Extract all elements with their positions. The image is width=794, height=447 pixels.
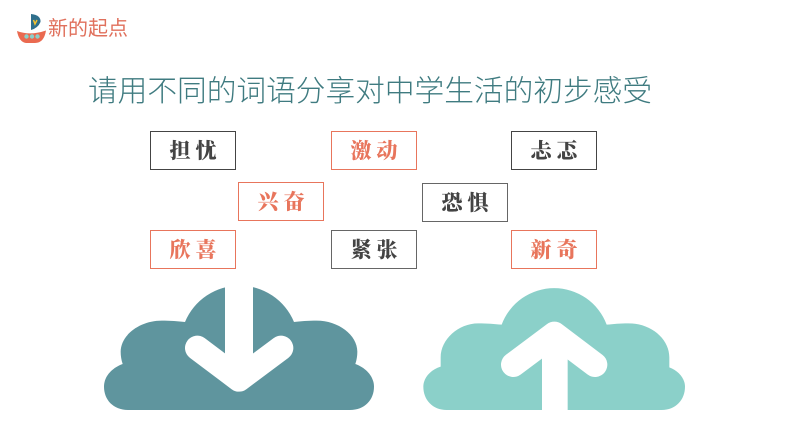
word box: 紧张: 紧张 [350,234,402,264]
word box: 恐惧 [422,183,508,222]
word box: 忐忑 [511,131,597,170]
word box: 新奇 [511,230,597,269]
word box: 恐惧: 恐惧 [442,187,494,217]
word box: 担忧 [150,131,236,170]
word box: 新奇: 新奇 [530,234,582,264]
icon: boat logo [17,14,46,43]
word box: 紧张 [331,230,417,269]
title: 请用不同的词语分享对中学生活的初步感受 [88,75,652,108]
word box: 兴奋 [238,182,324,221]
word box: 激动: 激动 [350,135,402,165]
logo text: 新的起点 [48,18,128,40]
icon: upload cloud [423,288,685,410]
icon: download cloud [104,287,374,410]
word box: 激动 [331,131,417,170]
word box: 担忧: 担忧 [170,135,222,165]
word box: 忐忑: 忐忑 [530,135,582,165]
word box: 兴奋: 兴奋 [258,186,310,216]
word box: 欣喜 [150,230,236,269]
word box: 欣喜: 欣喜 [170,234,222,264]
